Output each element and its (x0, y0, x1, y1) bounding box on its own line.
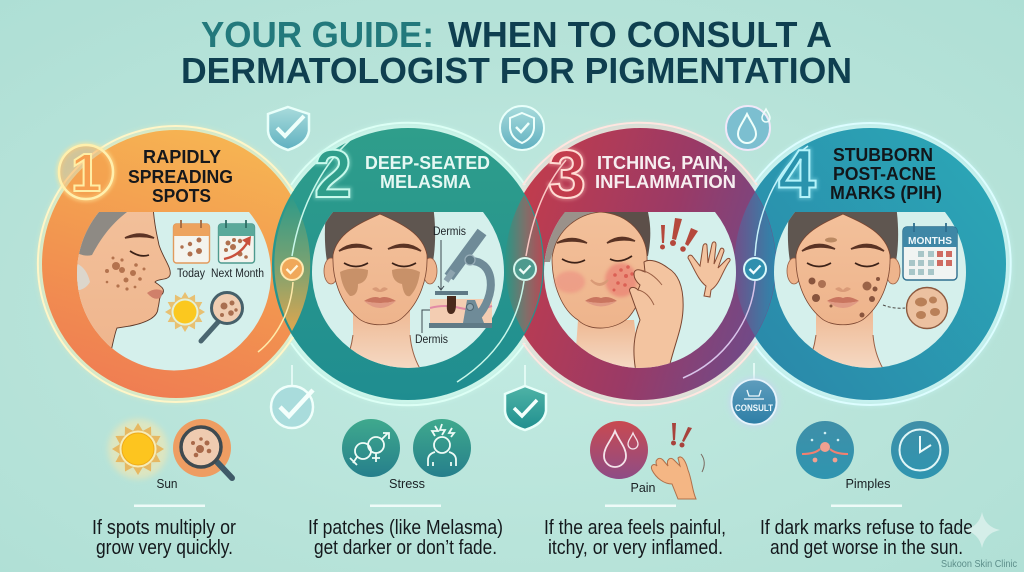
number 1 badge (59, 143, 113, 203)
description (92, 517, 236, 559)
heading: DEEP-SEATED (365, 153, 490, 173)
heading: ITCHING, PAIN, (597, 153, 728, 173)
arrow: dermis pointer (438, 240, 444, 290)
illustration panel (774, 205, 966, 375)
description: grow very quickly. (96, 537, 233, 559)
dashed pointer (883, 305, 905, 308)
illustration panel (544, 212, 736, 372)
check badge: green (514, 258, 536, 280)
heading: MELASMA (380, 172, 471, 192)
connector stems (292, 363, 754, 385)
icon: pimple (796, 421, 854, 479)
icon: face in profile (77, 212, 171, 348)
title (181, 14, 852, 91)
icon: sun (165, 292, 205, 332)
divider (134, 504, 205, 507)
heading (595, 153, 736, 192)
number 3: 3 (548, 136, 586, 212)
panel: rapidly spreading spots (59, 143, 271, 375)
illustration panel (77, 212, 271, 370)
check badge: orange (281, 258, 303, 280)
description (760, 517, 973, 559)
title: YOUR GUIDE: (201, 14, 434, 55)
heading: SPREADING (128, 167, 233, 187)
heading: SPOTS (152, 186, 211, 206)
description: If spots multiply or (92, 517, 236, 539)
description: If the area feels painful, (544, 517, 726, 539)
icon: gender symbols (342, 419, 400, 477)
title: WHEN TO CONSULT A (448, 14, 832, 55)
icon label: Stress (389, 476, 425, 491)
icon: exclamation marks (660, 218, 698, 252)
divider (605, 504, 676, 507)
icon: clock (891, 421, 949, 479)
icon: calendar today (174, 220, 210, 263)
icon label: Pimples (846, 476, 891, 491)
heading: STUBBORN (833, 145, 933, 165)
bottom block 1 (92, 419, 236, 559)
icon: consult badge (729, 377, 779, 427)
description: If patches (like Melasma) (308, 517, 503, 539)
title: DERMATOLOGIST FOR PIGMENTATION (181, 50, 852, 91)
panel: deep-seated melasma (312, 136, 504, 375)
icon label: Sun (156, 476, 178, 491)
icon: magnifier (201, 292, 242, 341)
number 2: 2 (314, 136, 352, 212)
icon label: Pain (630, 480, 656, 495)
icon: face with acne marks (787, 205, 900, 375)
bottom block 2 (308, 419, 503, 559)
divider (370, 504, 441, 507)
ring discs (38, 123, 1011, 405)
icon: sun (108, 419, 168, 479)
description (308, 517, 503, 559)
heading: MARKS (PIH) (830, 183, 942, 203)
description: If dark marks refuse to fade (760, 517, 973, 539)
calendar labels: Today (177, 268, 205, 280)
panel: stubborn post-acne marks (774, 136, 966, 375)
description: and get worse in the sun. (770, 537, 963, 559)
heading (128, 147, 233, 206)
illustration panel (312, 205, 504, 375)
bottom block 3 (544, 421, 726, 559)
icon: microscope (429, 232, 492, 328)
icon: waving hand (688, 242, 730, 297)
icon: shield check in circle (500, 106, 544, 150)
check badge: teal (744, 258, 766, 280)
description (544, 517, 726, 559)
icon: shield check bottom (505, 386, 546, 430)
icon: months calendar: MONTHS (908, 236, 952, 247)
description: itchy, or very inflamed. (548, 537, 723, 559)
panel: itching, pain, inflammation (544, 136, 736, 372)
calendar labels: Next Month (211, 268, 264, 280)
heading: RAPIDLY (143, 147, 221, 167)
icon: face with melasma patches (324, 205, 437, 375)
calendar labels (177, 268, 264, 280)
icon: months calendar (903, 223, 957, 280)
bracket line (422, 310, 430, 333)
label: dermis bottom: Dermis (415, 332, 448, 346)
icon: drops (590, 421, 648, 479)
bottom block 4 (760, 421, 973, 559)
icon: calendar next month (218, 220, 254, 263)
number 3: 3 (548, 136, 586, 212)
icon: skin detail circle (906, 288, 948, 328)
icon: consult badge: CONSULT (735, 403, 773, 414)
sparkle mark (964, 512, 1000, 548)
number 4: 4 (778, 136, 816, 212)
icon: magnifier on orange circle (173, 419, 232, 478)
icon: shield check top left (268, 107, 309, 150)
icon: stressed person (413, 419, 471, 477)
icon: face with rash and scratching hand (544, 212, 683, 372)
heading (365, 153, 490, 192)
icon: scratching hand (651, 423, 704, 499)
icon: water drop in circle (726, 106, 770, 150)
number 4: 4 (778, 136, 816, 212)
heading: INFLAMMATION (595, 172, 736, 192)
heading: POST-ACNE (833, 164, 936, 184)
heading (830, 145, 942, 203)
description: get darker or don’t fade. (314, 537, 497, 559)
icon: check in circle bottom (271, 386, 313, 428)
number 2: 2 (314, 136, 352, 212)
number 1 badge: 1 (71, 143, 101, 203)
label: dermis top: Dermis (433, 224, 466, 238)
divider (831, 504, 902, 507)
